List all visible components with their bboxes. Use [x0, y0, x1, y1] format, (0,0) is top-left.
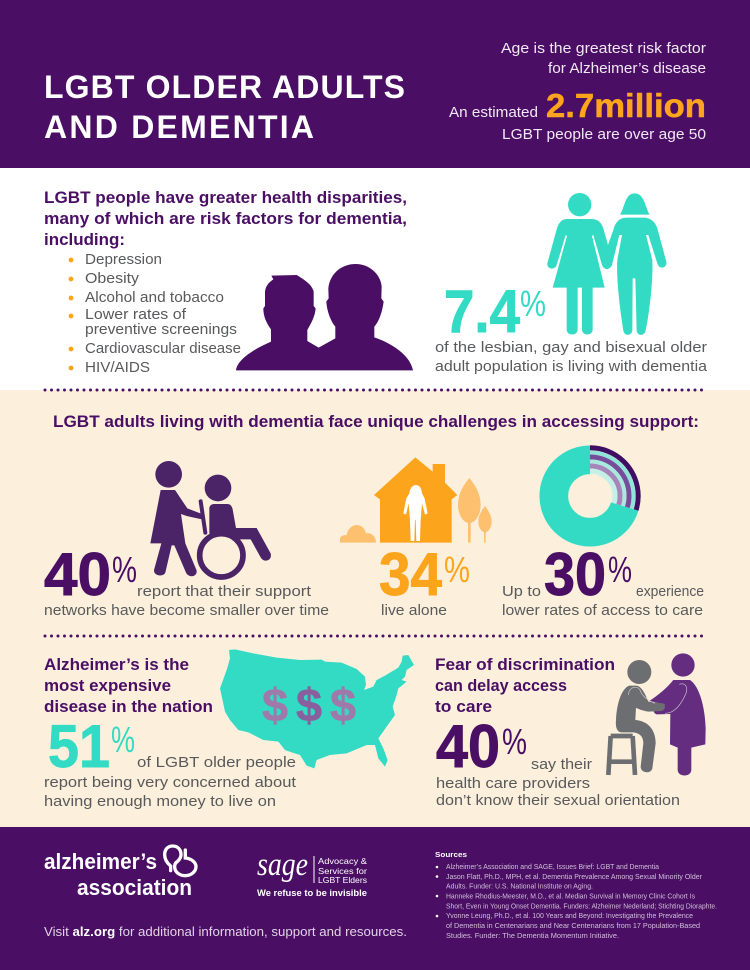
heading: fear of discrimination: to care [435, 697, 492, 716]
icon: US map with dollar signs: $ [296, 679, 322, 731]
text: sources: Yvonne Leung, Ph.D., et al. 100 Years and Beyond: Investigating the Prevalence [446, 913, 693, 920]
statistic: 30 percent: Up to [502, 583, 541, 600]
panel: footer [0, 827, 750, 970]
list: risk factors: HIV/AIDS [85, 359, 150, 376]
logo: SAGE: LGBT Elders [318, 875, 367, 885]
panel: health disparities [44, 188, 708, 376]
list: risk factors: Lower rates of [85, 306, 187, 323]
title: LGBT OLDER ADULTS [44, 69, 405, 105]
heading: health disparities: including: [44, 230, 125, 249]
statistic: 40 percent providers: 40 [436, 713, 500, 780]
panel: support networks [44, 461, 329, 619]
logo: SAGE: Advocacy & [318, 856, 367, 866]
title [44, 69, 405, 145]
logo: Alzheimer's Association: association [77, 875, 192, 900]
statistic: 40 percent: networks have become smaller over time [44, 602, 329, 619]
statistic: 30 percent [502, 541, 704, 619]
text: sources: Short, Even in Young Onset Dementia. Funders: Alzheimer Nederland; Stichting Dioraphte. [446, 904, 717, 910]
statistic: 40 percent providers: health care providers [436, 775, 590, 792]
text: visit alz.org: Visit alz.org for additional information, support and resources. [44, 924, 407, 939]
icon: caregiver pushing wheelchair [150, 461, 271, 577]
text: sources: of Dementia in Centenarians and Near Centenarians from 17 Population-Based [446, 923, 700, 930]
heading: unique challenges: LGBT adults living with dementia face unique challenges in accessing support: [53, 412, 699, 431]
statistic: 40 percent providers: don’t know their sexual orientation [436, 792, 680, 809]
icon: US map with dollar signs [220, 649, 414, 768]
icon: two men silhouettes [236, 264, 413, 370]
panel: fear of discrimination [435, 653, 706, 809]
text: sources: Jason Flatt, Ph.D., MPH, et al. Dementia Prevalence Among Sexual Minority Older [446, 874, 703, 881]
statistic: 40 percent: 40 [44, 541, 111, 608]
heading: fear of discrimination [435, 655, 615, 716]
heading: health disparities [44, 188, 407, 249]
statistic: 30 percent: lower rates of access to care [502, 602, 703, 619]
statistic: 51 percent: having enough money to live on [44, 793, 276, 810]
logo: Alzheimer's Association: alzheimer’s [44, 849, 157, 874]
statistic: 34 percent [379, 541, 470, 619]
heading: fear of discrimination: can delay access [435, 676, 567, 695]
statistic: 40 percent providers: say their [531, 756, 592, 773]
panel: expensive disease [44, 649, 414, 810]
list: risk factors [69, 251, 241, 376]
logo: SAGE: We refuse to be invisible [257, 888, 367, 899]
heading: most expensive disease: disease in the nation [44, 697, 213, 716]
statistic: 7.4 percent: of the lesbian, gay and bisexual older [435, 339, 707, 356]
panel: live alone [340, 457, 492, 619]
icon: two women holding hands [547, 193, 666, 335]
statistic: 51 percent [44, 713, 297, 810]
heading: health disparities: many of which are risk factors for dementia, [44, 209, 407, 228]
statistic: 51 percent: % [111, 719, 135, 760]
statistic: 34 percent: 34 [379, 541, 443, 608]
text: sources: Adults. Funder: U.S. National Institute on Aging. [446, 884, 593, 890]
header statistic: 2.7 million: 2.7million [546, 87, 706, 124]
text: sources: Hanneke Rhodius-Meester, M.D., et al. Median Survival in Memory Clinic Cohort Is [446, 894, 695, 900]
statistic: 7.4 percent: 7.4 [444, 278, 521, 345]
statistic: 51 percent: 51 [48, 713, 110, 780]
text: sources: Studies. Funder: The Dementia Momentum Initiative. [446, 933, 619, 940]
statistic: 30 percent: 30 [544, 541, 606, 608]
statistic: 34 percent: live alone [381, 602, 447, 619]
header statistic: 2.7 million: LGBT people are over age 50 [502, 126, 706, 143]
heading: most expensive disease [44, 655, 213, 716]
icon: house with person, trees and bush [340, 457, 492, 543]
statistic: 51 percent: report being very concerned about [44, 774, 297, 791]
statistic: 30 percent: experience [636, 583, 704, 600]
header statistic: 2.7 million [449, 40, 706, 143]
logo: SAGE: Services for [318, 866, 367, 876]
statistic: 34 percent: % [444, 549, 470, 590]
list: risk factors: Depression [85, 251, 162, 268]
heading: most expensive disease: Alzheimer’s is the [44, 655, 189, 674]
header statistic: 2.7 million: Age is the greatest risk factor [501, 40, 706, 57]
statistic: 7.4 percent: adult population is living with dementia [435, 358, 708, 375]
statistic: 30 percent: % [608, 549, 632, 590]
text: sources [435, 850, 717, 940]
statistic: 40 percent providers [436, 713, 680, 809]
icon: US map with dollar signs: $ [262, 679, 288, 731]
logo: SAGE [257, 847, 367, 899]
list: risk factors: Alcohol and tobacco [85, 289, 224, 306]
header statistic: 2.7 million: for Alzheimer’s disease [548, 60, 706, 77]
chart: donut 30 percent [542, 448, 638, 544]
statistic: 40 percent providers: % [502, 721, 527, 762]
list: risk factors: Obesity [85, 270, 140, 287]
panel: header [0, 0, 750, 168]
logo: Alzheimer's Association [44, 846, 196, 900]
statistic: 40 percent: % [112, 549, 137, 590]
panel: access to care [502, 448, 704, 619]
statistic: 7.4 percent [435, 278, 708, 375]
title: AND DEMENTIA [44, 109, 314, 145]
list: risk factors: preventive screenings [85, 321, 237, 338]
icon: two people with stool [608, 653, 706, 775]
statistic: 7.4 percent: % [520, 283, 546, 324]
header statistic: 2.7 million: An estimated [449, 104, 538, 121]
list: risk factors: Cardiovascular disease [85, 340, 241, 357]
statistic: 40 percent: report that their support [137, 583, 312, 600]
heading: most expensive disease: most expensive [44, 676, 171, 695]
statistic: 40 percent [44, 541, 329, 619]
text: sources: Alzheimer’s Association and SAGE, Issues Brief: LGBT and Dementia [446, 864, 659, 871]
heading: health disparities: LGBT people have greater health disparities, [44, 188, 407, 207]
logo: SAGE: sage [257, 847, 308, 883]
heading: fear of discrimination: Fear of discrimination [435, 655, 615, 674]
icon: US map with dollar signs: $ [330, 679, 356, 731]
text: sources: Sources [435, 850, 467, 859]
statistic: 51 percent: of LGBT older people [137, 754, 296, 771]
